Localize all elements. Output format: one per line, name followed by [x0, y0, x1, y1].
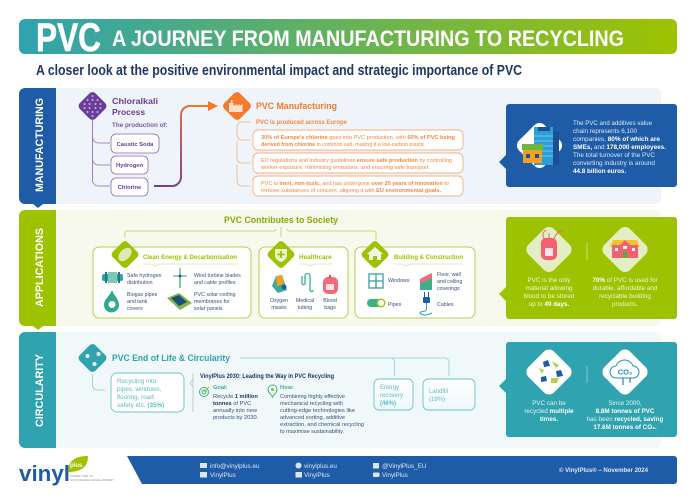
icon: window: [369, 274, 383, 288]
callout: applications facts: [499, 217, 677, 319]
box: inert non-toxic: remove substances of concern, aligning it with EU environmental goals.: [261, 188, 442, 194]
text: PVC is produced across Europe: PVC is produced across Europe: [256, 119, 348, 126]
contact: website and twitter: [296, 462, 337, 479]
text: value chain: companies, 80% of which are: [573, 136, 661, 143]
logo: vinylplus: SUSTAINABLE DEVELOPMENT: [70, 478, 114, 482]
text: value chain: chain represents 6,100: [573, 128, 638, 135]
footer bar: [127, 456, 677, 484]
heading: building: Building & Construction: [394, 254, 463, 261]
text: biogas: [127, 292, 158, 312]
text: recycled multiple times: [524, 400, 574, 423]
heading: end of life: PVC End of Life & Circularity: [112, 353, 230, 363]
icon: target: [200, 387, 209, 396]
box: safety regulations: EU regulations and industry guidelines ensure safe production by controlling: [261, 158, 452, 164]
text: recycled multiple times: PVC can be: [532, 400, 566, 407]
icon: cables: [420, 292, 432, 315]
icon: medical tubing: [302, 274, 313, 292]
box: recycling 35%: Recycling into: [117, 378, 157, 385]
text: blood storage: material allowing: [526, 285, 573, 292]
icon: oxygen mask: [272, 275, 287, 293]
text: value chain: converting industry is around: [573, 160, 655, 167]
icon: biogas flame: [104, 290, 119, 312]
contact: email and linkedin: [200, 463, 260, 479]
contact: email and linkedin: VinylPlus: [210, 472, 236, 479]
text: tonnes saved: Since 2000,: [608, 400, 642, 407]
icon: CO2 cloud diamond: CO₂: [618, 368, 632, 376]
text: solar: membranes for: [194, 299, 230, 305]
text: tonnes saved: 17.6M tonnes of CO₂.: [593, 424, 657, 431]
text: floor coverings: and ceiling: [437, 279, 462, 285]
box: energy recovery: recovery: [380, 393, 403, 399]
tab label: circularity: CIRCULARITY: [34, 353, 46, 427]
section tab: applications: APPLICATIONS: [34, 228, 46, 307]
text: blood bags: [323, 298, 337, 311]
icon: CO2 cloud diamond: [600, 347, 650, 397]
box: recycling 35%: safety etc. (35%): [117, 402, 164, 409]
text: biogas: covers: [127, 306, 143, 312]
panel: circularity: [19, 332, 677, 448]
connector: chloralkali tree: [92, 120, 110, 186]
text: blood bags: bags: [324, 305, 336, 311]
icon: blood bag: [323, 275, 338, 294]
contact: website and twitter: vinylplus.eu: [304, 463, 337, 470]
box: landfill: (19%): [429, 397, 445, 403]
text: blood storage: PVC is the only: [527, 277, 571, 284]
contact: email and linkedin: info@vinylplus.eu: [210, 463, 260, 470]
card: clean energy: [93, 240, 251, 318]
icon: location pin: [268, 385, 277, 397]
box: energy recovery: Energy: [380, 385, 399, 391]
text: building share: 70% of PVC is used for: [592, 277, 658, 284]
section tab: circularity: [19, 332, 56, 448]
icon: solar panel: [167, 293, 192, 310]
text: goal: tonnes of PVC: [213, 401, 251, 407]
text: building share: recyclable building: [599, 293, 651, 300]
box: energy recovery: [374, 379, 413, 410]
connector: circularity lines: [92, 358, 449, 390]
section tab: manufacturing: [19, 88, 56, 208]
logo: vinylplus: vinyl: [19, 461, 70, 486]
box: safety regulations: worker exposure, minimising emissions, and ensuring safe transport.: [261, 165, 430, 171]
text: solar: solar panels: [194, 306, 223, 312]
text: recycled multiple times: times.: [540, 416, 558, 423]
heading: chloralkali process: [112, 96, 158, 117]
title banner: A JOURNEY FROM MANUFACTURING TO RECYCLING: [112, 26, 624, 51]
chevron divider: [190, 373, 193, 412]
text: building share: durable, affordable and: [593, 285, 658, 292]
icon: shield diamond: [266, 240, 296, 269]
contact: x and youtube: [373, 463, 427, 479]
text: safe hydrogen: distribution: [127, 280, 153, 286]
icon: factory diamond: [221, 90, 253, 122]
icon: house diamond: [360, 240, 390, 269]
text: value chain: The PVC and additives value: [573, 120, 652, 127]
text: value chain: [573, 120, 666, 175]
box: caustic soda: [111, 134, 159, 153]
text: building share: products.: [612, 301, 638, 308]
text: how: to maximise sustainability.: [280, 429, 344, 435]
text: the production of: The production of:: [112, 122, 168, 129]
icon: circularity diamond: [77, 342, 108, 374]
text: cables: Cables: [437, 302, 454, 308]
box: chlorine share: [253, 130, 463, 150]
text: tonnes saved: 8.8M tonnes of PVC: [596, 408, 655, 415]
text: oxygen masks: masks: [271, 305, 287, 311]
section tab: manufacturing: MANUFACTURING: [34, 98, 46, 192]
arrow: chlorine to PVC manufacturing: [154, 101, 218, 186]
text: how: Combining highly effective: [280, 394, 345, 400]
text: tonnes saved: [587, 400, 663, 431]
heading: PVC contributes to society: PVC Contributes to Society: [224, 215, 338, 225]
icon: house diamond: [600, 224, 650, 275]
text: value chain: 44.8 billion euros.: [573, 168, 626, 175]
text: medical tubing: [296, 298, 314, 311]
text: biogas: Biogas pipes: [127, 292, 158, 298]
logo: vinylplus: plus: [70, 463, 83, 469]
box: inert non-toxic: [253, 176, 463, 196]
text: value chain: SMEs, and 178,000 employees.: [573, 144, 666, 151]
box: chlorine: Chlorine: [118, 185, 142, 191]
text: floor coverings: Floor, wall: [437, 272, 461, 278]
text: floor coverings: coverings: [437, 286, 460, 292]
divider: [586, 243, 588, 260]
text: windows: Windows: [388, 278, 410, 284]
text: safe hydrogen: [127, 273, 162, 286]
box: recycling 35%: flooring, road: [117, 394, 154, 401]
heading: clean energy: Clean Energy & Decarbonisation: [143, 254, 237, 261]
text: how: extraction, and chemical recycling: [280, 422, 364, 428]
callout: value chain: [499, 104, 677, 187]
text: wind turbine: Wind turbine blades: [194, 273, 241, 279]
text: goal: products by 2030.: [213, 415, 259, 421]
panel: applications: [19, 210, 677, 330]
text: wind turbine: [194, 273, 241, 286]
section tab: applications: [19, 210, 56, 330]
box: caustic soda: Caustic Soda: [117, 142, 154, 148]
divider: [586, 366, 588, 383]
contact: x and youtube: @VinylPlus_EU: [382, 463, 427, 470]
text: oxygen masks: [270, 298, 288, 311]
contact: x and youtube: VinylPlus: [382, 472, 408, 479]
heading: chloralkali process: Chloralkali: [112, 96, 158, 106]
text: solar: [194, 292, 236, 312]
box: chlorine share: derived from chlorine in common salt, making it a low-carbon plastic.: [261, 142, 426, 148]
box: hydrogen: [111, 156, 148, 174]
text: biogas: and tank: [127, 299, 148, 305]
text: value chain: The total turnover of the PVC: [573, 152, 655, 159]
text: blood storage: blood to be stored: [524, 293, 575, 300]
connector: society bracket: [125, 227, 376, 240]
icon: buildings: [514, 120, 565, 171]
text: goal: Recycle 1 million: [213, 394, 258, 400]
icon: hydrogen pipe: [102, 272, 123, 283]
title banner: PVC: [36, 16, 101, 60]
text: tonnes saved: has been recycled, saving: [587, 416, 663, 423]
text: goal: annually into new: [213, 408, 258, 414]
callout: circularity facts: [499, 342, 677, 437]
heading: PVC manufacturing: PVC Manufacturing: [256, 101, 337, 111]
text: recycled multiple times: recycled multiple: [524, 408, 574, 415]
icon: floor coverings: [420, 273, 432, 290]
connector: manufacturing bracket: [237, 122, 251, 186]
box: recycling 35%: pipes, windows,: [117, 386, 162, 393]
box: landfill: Landfill: [429, 389, 448, 395]
logo: vinylplus: [19, 456, 114, 486]
card: building: [355, 240, 475, 318]
text: floor coverings: [437, 272, 462, 292]
icon: chloralkali diamond: [77, 90, 108, 122]
text: wind turbine: and cable profiles: [194, 280, 236, 286]
box: recycling 35%: [111, 373, 184, 412]
text: goal: Goal:: [213, 385, 228, 391]
box: inert non-toxic: PVC is inert, non-toxic, and has undergone over 20 years of innovation to: [261, 181, 449, 187]
logo: vinylplus: COMMITTED TO: [70, 474, 94, 478]
heading: chloralkali process: Process: [112, 107, 145, 117]
text: blood storage: [524, 277, 575, 308]
text: how: mechanical recycling with: [280, 401, 343, 407]
text: solar: PVC solar roofing: [194, 292, 236, 298]
panel: manufacturing: [19, 88, 677, 208]
box: hydrogen: Hydrogen: [116, 163, 143, 169]
text: building share: [592, 277, 658, 308]
box: chlorine: [111, 178, 148, 196]
text: pipes: Pipes: [388, 302, 402, 308]
icon: blood bag diamond: [524, 224, 574, 275]
heading: healthcare: Healthcare: [299, 254, 332, 261]
heading: vinylplus 2030: VinylPlus 2030: Leading the Way in PVC Recycling: [200, 373, 334, 380]
text: how: advanced sorting, additive: [280, 415, 345, 421]
contact: website and twitter: VinylPlus: [304, 472, 330, 479]
box: landfill: [423, 379, 475, 410]
text: medical tubing: Medical: [296, 298, 314, 304]
text: goal: [213, 385, 259, 421]
text: medical tubing: tubing: [298, 305, 312, 311]
text: how: [280, 385, 364, 435]
icon: pipes: [367, 299, 385, 307]
text: oxygen masks: Oxygen: [270, 298, 288, 304]
subtitle: A closer look at the positive environmental impact and strategic importance of PVC: [36, 63, 522, 79]
icon: wind turbine: [173, 268, 187, 288]
text: blood bags: Blood: [323, 298, 337, 304]
text: blood storage: up to 49 days.: [529, 301, 570, 308]
box: chlorine share: 30% of Europe's chlorine goes into PVC production, with 60% of PVC being: [261, 135, 455, 141]
copyright: © VinylPlus® – November 2024: [559, 467, 649, 474]
text: how: cutting-edge technologies like: [280, 408, 355, 414]
icon: recycle diamond: [524, 347, 574, 397]
text: safe hydrogen: Safe hydrogen: [127, 273, 162, 279]
text: how: How:: [280, 385, 294, 391]
card: healthcare: [259, 240, 348, 318]
box: energy recovery: (46%): [380, 401, 396, 407]
title banner: [19, 16, 677, 60]
box: safety regulations: [253, 153, 463, 173]
icon: leaf diamond: [110, 240, 140, 269]
